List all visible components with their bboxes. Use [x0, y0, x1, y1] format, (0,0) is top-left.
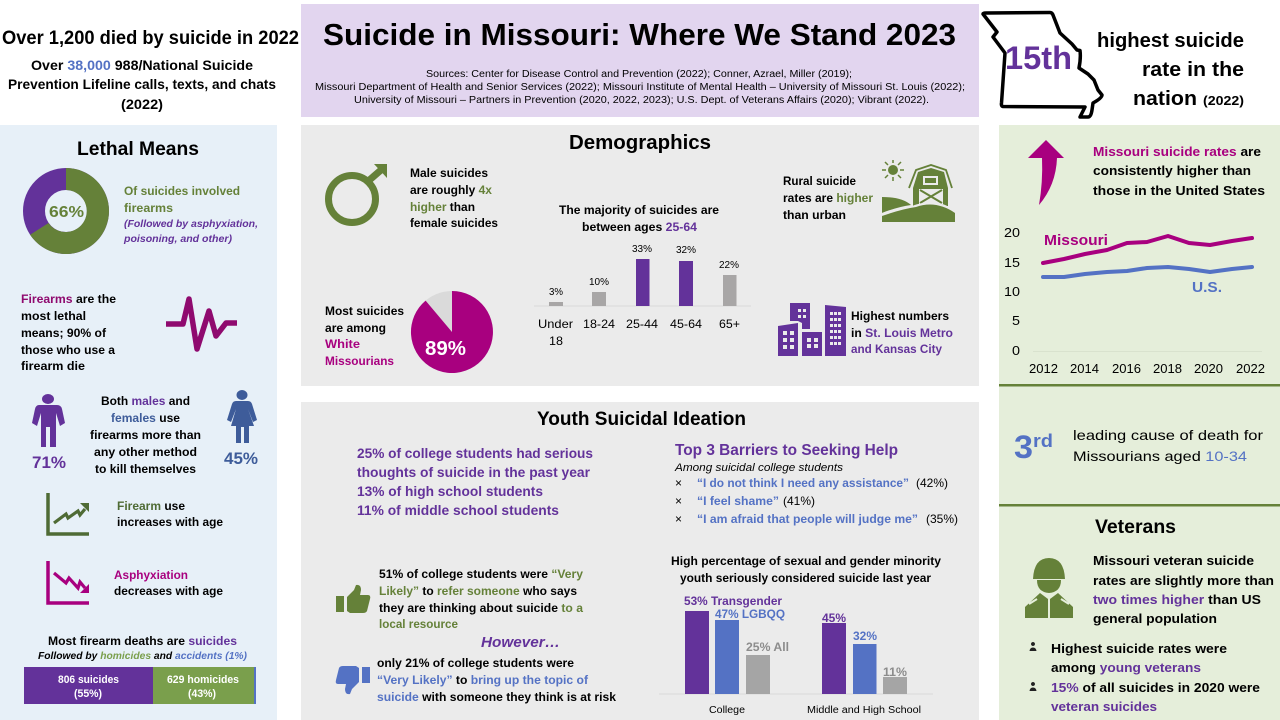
bar chart: age groups: 22%: [719, 260, 739, 271]
bar chart: sexual and gender minority youth: College: [709, 705, 745, 716]
veteran bullets: veteran suicides: [1051, 699, 1157, 714]
referral text: they are thinking about suicide to a: [379, 601, 583, 615]
barriers list: “I feel shame”: [697, 494, 779, 508]
bar chart: sexual and gender minority youth: 53% Transgender: [684, 594, 782, 608]
bar chart: age groups: 3%: [549, 287, 563, 298]
line chart: suicide rates 2012-2022: 2016: [1112, 361, 1141, 376]
firearms lethality text: [21, 292, 116, 373]
urban text: in St. Louis Metro: [851, 326, 953, 340]
firearms lethality text: those who use a: [21, 343, 115, 357]
barriers list: (35%): [926, 512, 958, 526]
urban text: Highest numbers: [851, 309, 949, 323]
panel: demographics: [301, 125, 979, 386]
veteran rate text: rates are slightly more than: [1093, 573, 1274, 588]
pie chart: 89%: 89%: [425, 338, 466, 360]
icon: female figure with 45%: 45%: [224, 449, 258, 468]
line chart: suicide rates 2012-2022: 2012: [1029, 361, 1058, 376]
bring up topic text: only 21% of college students were: [377, 656, 574, 670]
rural text: Rural suicide: [783, 174, 856, 188]
barriers list: (41%): [783, 494, 815, 508]
panel: top-left statistics: (2022): [121, 96, 163, 112]
white Missourians text: are among: [325, 321, 386, 335]
stacked bar: firearm deaths: 629 homicides: [167, 674, 239, 686]
comparison text: Missouri suicide rates are: [1093, 144, 1261, 159]
comparison text: those in the United States: [1093, 183, 1265, 198]
icon: soldier: [1025, 558, 1073, 618]
student statistics: thoughts of suicide in the past year: [357, 464, 591, 480]
male text: higher than: [410, 200, 475, 214]
both sexes text: firearms more than: [90, 428, 201, 442]
panel: header title and sources: [301, 4, 979, 117]
veteran rate text: two times higher than US: [1093, 592, 1261, 607]
firearms lethality text: Firearms are the: [21, 292, 116, 306]
rank caption: [1097, 30, 1244, 110]
panel: header title and sources: Missouri Department of Health and Senior Services (2022); Missouri Institute of Mental Health – University of Missouri St. Louis (2022);: [315, 82, 965, 93]
firearm age text: [117, 499, 223, 529]
heading: veterans: Veterans: [1095, 517, 1176, 538]
bar chart: sexual and gender minority youth: 25% All: [746, 640, 789, 654]
leading cause of death stat: [1014, 427, 1263, 465]
bar chart: sexual and gender minority youth: High percentage of sexual and gender minority: [671, 554, 941, 568]
asphyxiation age text: decreases with age: [114, 584, 223, 598]
bar chart: age groups: 65+: [719, 317, 740, 331]
bar chart: age groups: 32%: [676, 245, 696, 256]
comparison text: consistently higher than: [1093, 163, 1251, 178]
firearm share text: Of suicides involved: [124, 184, 240, 198]
white Missourians text: Most suicides: [325, 304, 404, 318]
leading cause of death stat: 3: [1014, 429, 1033, 465]
stacked bar: firearm deaths: [24, 667, 256, 704]
barriers list: “I am afraid that people will judge me”: [697, 512, 918, 526]
heading: Lethal Means: [77, 139, 199, 160]
panel: youth suicidal ideation: [301, 402, 979, 720]
bar chart: sexual and gender minority youth: 32%: [853, 629, 877, 643]
panel: 15th highest rate: [983, 12, 1244, 117]
male text: [410, 166, 498, 230]
firearm share text: poisoning, and other): [123, 234, 233, 245]
line chart: suicide rates 2012-2022: 2020: [1194, 361, 1223, 376]
asphyxiation age text: [114, 568, 223, 598]
bar chart: age groups: The majority of suicides are: [559, 203, 719, 217]
bring up topic text: [377, 656, 616, 704]
panel: top-left statistics: Prevention Lifeline calls, texts, and chats: [8, 76, 276, 92]
both sexes text: to kill themselves: [95, 462, 196, 476]
student statistics: [357, 445, 593, 518]
male text: female suicides: [410, 216, 498, 230]
leading cause of death stat: leading cause of death for: [1073, 427, 1263, 443]
referral text: 51% of college students were “Very: [379, 567, 583, 581]
leading cause of death stat: Missourians aged 10-34: [1073, 448, 1247, 464]
bring up topic text: suicide with someone they think is at risk: [377, 690, 616, 704]
veteran bullets: Highest suicide rates were: [1051, 641, 1227, 656]
icon: male figure with 71%: 71%: [32, 453, 66, 472]
urban text: and Kansas City: [851, 342, 942, 356]
stacked bar: firearm deaths: 806 suicides: [58, 674, 119, 686]
bar chart: age groups: [534, 203, 751, 348]
firearm deaths heading: [38, 634, 248, 662]
barriers list: Among suicidal college students: [674, 462, 844, 474]
rank caption: nation: [1133, 88, 1197, 110]
bar chart: age groups: 18: [549, 334, 563, 348]
student statistics: 13% of high school students: [357, 483, 543, 499]
icon: male symbol: [328, 164, 387, 222]
barriers list: Top 3 Barriers to Seeking Help: [675, 442, 898, 459]
barriers list: ×: [675, 494, 682, 508]
barriers list: “I do not think I need any assistance”: [697, 476, 909, 490]
bar chart: age groups: between ages 25-64: [582, 220, 697, 234]
firearms lethality text: most lethal: [21, 309, 86, 323]
rural text: rates are higher: [783, 191, 873, 205]
firearm age text: increases with age: [117, 515, 223, 529]
both sexes text: [90, 394, 201, 476]
barriers list: ×: [675, 476, 682, 490]
firearm age text: Firearm use: [117, 499, 185, 513]
bar chart: sexual and gender minority youth: Middle and High School: [807, 705, 921, 716]
firearms lethality text: firearm die: [21, 359, 85, 373]
panel: header title and sources: Sources: Center for Disease Control and Prevention (2022); Conner, Azrael, Miller (2019);: [426, 69, 852, 80]
barriers list: [674, 442, 958, 526]
barriers list: (42%): [916, 476, 948, 490]
panel: header title and sources: University of Missouri – Partners in Prevention (2020, 2022, 2023); U.S. Dept. of Veterans Affairs (2020); Vibrant (2022).: [354, 95, 929, 106]
bar chart: age groups: 33%: [632, 244, 652, 255]
bar chart: age groups: 25-44: [626, 317, 658, 331]
bar chart: sexual and gender minority youth: [659, 554, 941, 716]
heading: Demographics: [569, 132, 711, 154]
line chart: suicide rates 2012-2022: U.S.: [1192, 279, 1222, 296]
rank caption: rate in the: [1142, 59, 1244, 81]
rank number: 15th: [1005, 40, 1072, 76]
student statistics: 25% of college students had serious: [357, 445, 593, 461]
pie chart: 89%: [411, 291, 493, 373]
bring up topic text: “Very Likely” to bring up the topic of: [377, 673, 589, 687]
line chart: suicide rates 2012-2022: 2018: [1153, 361, 1182, 376]
icon: curved up arrow: [1028, 140, 1064, 205]
both sexes text: any other method: [94, 445, 197, 459]
bar chart: sexual and gender minority youth: youth seriously considered suicide last year: [680, 571, 931, 585]
donut chart: 66% firearms: 66%: [49, 204, 84, 221]
panel: header title and sources: Suicide in Missouri: Where We Stand 2023: [323, 17, 956, 52]
icon: female figure with 45%: [224, 390, 258, 468]
icon: increasing trend: [48, 493, 89, 534]
line chart: suicide rates 2012-2022: 2022: [1236, 361, 1265, 376]
bar chart: age groups: 10%: [589, 277, 609, 288]
veteran bullets: 15% of all suicides in 2020 were: [1051, 680, 1260, 695]
icon: decreasing trend: [48, 561, 89, 603]
male text: Male suicides: [410, 166, 488, 180]
icon: city buildings: [778, 303, 846, 356]
referral text: [379, 567, 583, 631]
referral text: Likely” to refer someone who says: [379, 584, 577, 598]
stacked bar: firearm deaths: (43%): [188, 688, 216, 700]
icon: heartbeat: [166, 299, 237, 349]
urban text: [851, 309, 953, 356]
line chart: suicide rates 2012-2022: 0: [1012, 343, 1020, 358]
icon: thumbs up: [336, 585, 370, 613]
icon: barn and sun: [882, 160, 955, 222]
line chart: suicide rates 2012-2022: Missouri: [1044, 232, 1108, 249]
line chart: suicide rates 2012-2022: 2014: [1070, 361, 1099, 376]
veteran rate text: Missouri veteran suicide: [1093, 553, 1254, 568]
firearms lethality text: means; 90% of: [21, 326, 107, 340]
donut chart: 66% firearms: [30, 168, 109, 254]
firearm share text: [123, 184, 258, 245]
line chart: suicide rates 2012-2022: 15: [1004, 255, 1020, 270]
rural text: than urban: [783, 208, 846, 222]
bar chart: sexual and gender minority youth: 45%: [822, 611, 846, 625]
icon: male figure with 71%: [32, 394, 66, 472]
rank caption: (2022): [1203, 93, 1244, 108]
leading cause of death stat: rd: [1033, 431, 1053, 451]
student statistics: 11% of middle school students: [357, 502, 559, 518]
bar chart: age groups: Under: [538, 317, 573, 331]
rural text: [783, 174, 873, 222]
firearm share text: firearms: [124, 201, 173, 215]
barriers list: ×: [675, 512, 682, 526]
icon: Missouri outline: [983, 12, 1102, 117]
bar chart: age groups: 45-64: [670, 317, 702, 331]
white Missourians text: Missourians: [325, 354, 394, 368]
heading: Youth Suicidal Ideation: [537, 409, 746, 430]
firearm deaths heading: Most firearm deaths are suicides: [48, 634, 237, 648]
panel: lethal means: [0, 125, 277, 720]
panel: top-left statistics: [2, 28, 299, 112]
referral text: local resource: [379, 617, 458, 631]
stacked bar: firearm deaths: (55%): [74, 688, 102, 700]
veteran bullets: [1030, 641, 1260, 714]
both sexes text: females use: [111, 411, 180, 425]
firearm share text: (Followed by asphyxiation,: [124, 219, 258, 230]
white Missourians text: [325, 304, 404, 368]
line chart: suicide rates 2012-2022: 10: [1004, 284, 1020, 299]
veteran rate text: [1093, 553, 1274, 626]
bar chart: age groups: 18-24: [583, 317, 615, 331]
bar chart: sexual and gender minority youth: 47% LGBQQ: [715, 607, 785, 621]
panel: top-left statistics: Over 1,200 died by suicide in 2022: [2, 28, 299, 49]
line chart: suicide rates 2012-2022: 5: [1012, 313, 1020, 328]
bar chart: sexual and gender minority youth: 11%: [883, 665, 907, 679]
veteran bullets: among young veterans: [1051, 660, 1201, 675]
line chart: suicide rates 2012-2022: [1004, 225, 1265, 376]
comparison text: [1093, 144, 1265, 198]
however callout: However…: [481, 634, 560, 651]
icon: thumbs down: [336, 666, 370, 694]
asphyxiation age text: Asphyxiation: [114, 568, 188, 582]
line chart: suicide rates 2012-2022: 20: [1004, 225, 1020, 240]
veteran rate text: general population: [1093, 611, 1217, 626]
both sexes text: Both males and: [101, 394, 190, 408]
firearm deaths heading: Followed by homicides and accidents (1%): [38, 651, 248, 662]
white Missourians text: White: [325, 337, 360, 351]
rank caption: highest suicide: [1097, 30, 1244, 52]
panel: top-left statistics: Over 38,000 988/National Suicide: [31, 57, 253, 73]
panel: Missouri vs US rates: [999, 125, 1280, 720]
male text: are roughly 4x: [410, 183, 492, 197]
